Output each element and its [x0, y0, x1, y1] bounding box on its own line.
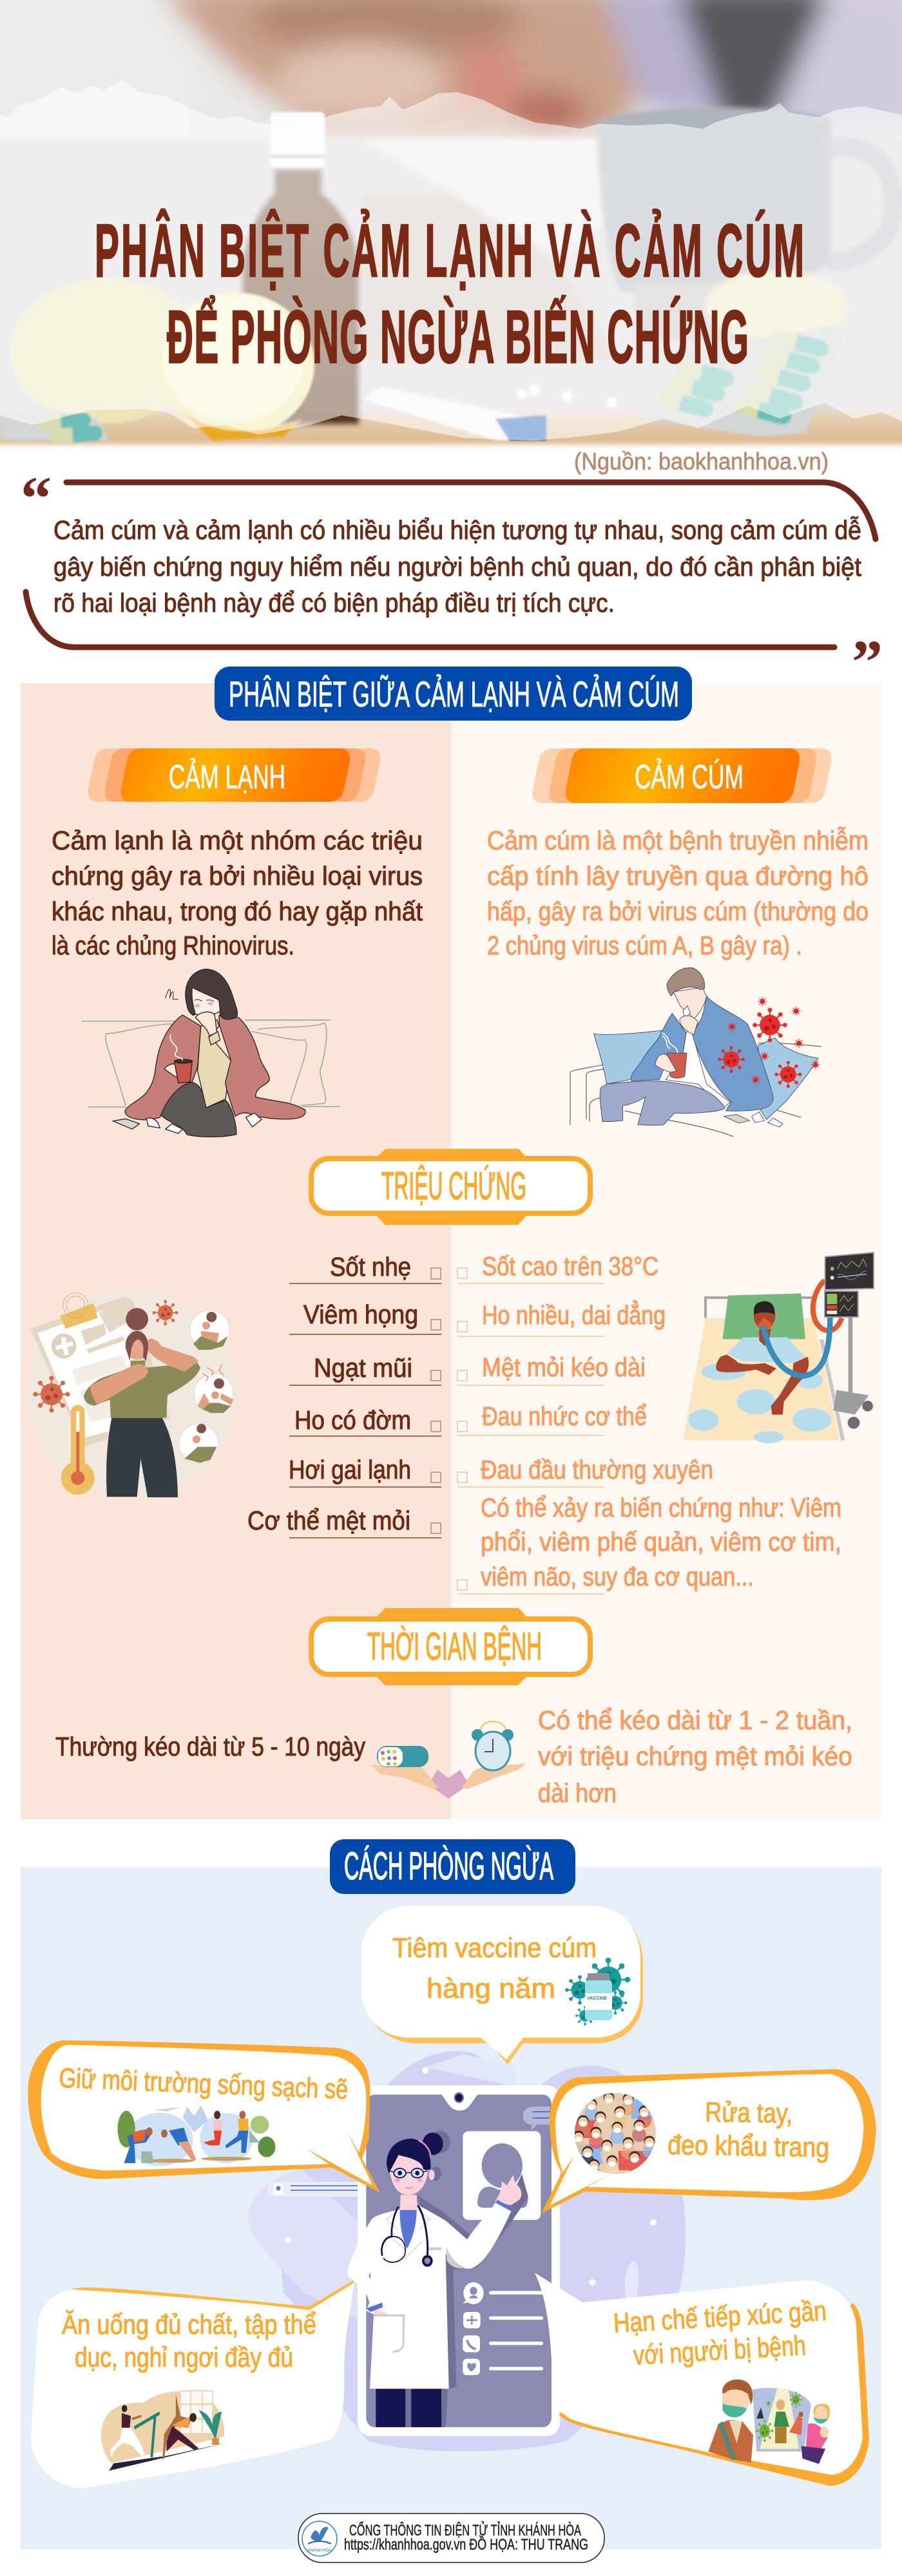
- footer credit pill: [298, 2514, 604, 2562]
- opening quote mark: “: [21, 464, 52, 533]
- text: flu duration: với triệu chứng mệt mỏi kéo: [538, 1741, 852, 1771]
- icon: vaccine vial with virus: [566, 1958, 629, 2025]
- illustration: woman with a cold: [82, 969, 340, 1137]
- heading: prevention: CÁCH PHÒNG NGỪA: [344, 1844, 553, 1888]
- icon: provincial portal logo: [302, 2521, 337, 2556]
- icon: vaccine vial with virus: VACCINE: [587, 1996, 607, 2001]
- symptom list: common cold: Viêm họng: [303, 1300, 418, 1329]
- text: common cold definition: Cảm lạnh là một nhóm các triệu: [52, 826, 423, 855]
- background lavender blobs: [248, 2051, 686, 2451]
- text: common cold definition: chứng gây ra bởi nhiều loại virus: [52, 861, 423, 891]
- small chat label left of phone: [267, 2182, 383, 2197]
- symptom list: flu: [457, 1251, 841, 1594]
- torn translucent paper overlay: [0, 80, 902, 440]
- title: PHÂN BIỆT CẢM LẠNH VÀ CẢM CÚM: [95, 209, 804, 292]
- symptom list: flu: Sốt cao trên 38°C: [482, 1251, 658, 1281]
- symptom list: flu: Ho nhiều, dai dẳng: [482, 1300, 666, 1330]
- illustration: people cleaning up: [117, 2105, 275, 2166]
- phone body: [358, 2085, 560, 2436]
- symptom list: common cold: Ho có đờm: [294, 1405, 411, 1435]
- intro text: gây biến chứng nguy hiểm nếu người bệnh chủ quan, do đó cần phân biệt: [53, 552, 862, 582]
- heading: illness duration: [311, 1608, 590, 1685]
- intro text: [53, 515, 862, 618]
- symptom list: flu: phổi, viêm phế quản, viêm cơ tim,: [481, 1527, 841, 1557]
- callout: hand washing and masks: Rửa tay,: [705, 2097, 793, 2129]
- footer credit pill: CỔNG THÔNG TIN ĐIỆN TỬ TỈNH KHÁNH HÒA: [349, 2521, 581, 2539]
- callout: keep environment clean: [28, 2040, 380, 2193]
- symptom list: flu: Đau đầu thường xuyên: [481, 1455, 713, 1484]
- footer credit pill: https://khanhhoa.gov.vn ĐỒ HỌA: THU TRANG: [344, 2535, 588, 2553]
- intro text: rõ hai loại bệnh này để có biện pháp điều trị tích cực.: [53, 588, 615, 618]
- text: flu definition: Cảm cúm là một bệnh truyền nhiễm: [487, 826, 868, 855]
- text: common cold definition: khác nhau, trong đó hay gặp nhất: [52, 896, 423, 926]
- callout: annual flu vaccine: hàng năm: [427, 1973, 555, 2004]
- illustration: man with flu and viruses: [570, 968, 821, 1137]
- symptom list: flu: Có thể xảy ra biến chứng như: Viêm: [481, 1493, 841, 1522]
- contact list icons: [463, 2282, 542, 2375]
- symptom list: common cold: Sốt nhẹ: [330, 1252, 411, 1282]
- panel: prevention: [21, 1867, 881, 2549]
- heading: illness duration: THỜI GIAN BỆNH: [367, 1625, 542, 1668]
- text: flu definition: [487, 826, 868, 960]
- source credit: (Nguồn: baokhanhhoa.vn): [574, 448, 829, 475]
- callout: nutrition exercise rest: dục, nghỉ ngơi đầy đủ: [75, 2342, 293, 2373]
- pill heading: common cold: CẢM LẠNH: [169, 758, 285, 796]
- symptom list: common cold: Cơ thể mệt mỏi: [247, 1506, 410, 1535]
- illustration: woman with symptoms: [28, 1289, 236, 1497]
- callout: nutrition exercise rest: [31, 2280, 354, 2488]
- symptom list: flu: Đau nhức cơ thể: [482, 1401, 647, 1431]
- symptom list: flu: viêm não, suy đa cơ quan...: [481, 1562, 754, 1591]
- heading: symptoms: TRIỆU CHỨNG: [381, 1164, 526, 1208]
- icon: hands holding pills and clock: [371, 1721, 526, 1799]
- illustration: people in masks keeping distance: [709, 2380, 830, 2464]
- callout: limit close contact: với người bị bệnh: [633, 2330, 807, 2371]
- illustration: people exercising: [101, 2391, 227, 2471]
- text: common cold definition: là các chủng Rhinovirus.: [52, 931, 294, 960]
- callout: hand washing and masks: [541, 2069, 876, 2213]
- callout: annual flu vaccine: [361, 1906, 643, 2065]
- title: [95, 209, 804, 379]
- callout: annual flu vaccine: Tiêm vaccine cúm: [392, 1933, 597, 1964]
- pill heading: common cold: [88, 748, 380, 802]
- symptom list: flu: Mệt mỏi kéo dài: [482, 1352, 646, 1382]
- callout: limit close contact: [535, 2273, 869, 2486]
- symptom list: common cold: Ngạt mũi: [314, 1353, 412, 1383]
- illustration: phone with doctor: [347, 2085, 560, 2436]
- text: flu duration: [538, 1705, 852, 1808]
- panel: comparison: [21, 683, 881, 1819]
- intro quote block: [21, 464, 883, 696]
- callout: keep environment clean: Giữ môi trường sống sạch sẽ: [59, 2063, 349, 2105]
- hero photo: sick person with medicine: [0, 0, 902, 444]
- text: flu duration: Có thể kéo dài từ 1 - 2 tuần,: [538, 1705, 852, 1735]
- text: cold duration: Thường kéo dài từ 5 - 10 ngày: [55, 1732, 365, 1761]
- heading: symptoms: [311, 1149, 590, 1225]
- title: ĐỂ PHÒNG NGỪA BIẾN CHỨNG: [167, 296, 749, 379]
- heading: comparison: [215, 667, 692, 721]
- doctor: [347, 2131, 528, 2427]
- callout: hand washing and masks: đeo khẩu trang: [667, 2130, 830, 2163]
- illustration: crowd wearing masks: [575, 2093, 656, 2174]
- symptom list: common cold: Hơi gai lạnh: [289, 1455, 411, 1484]
- text: flu duration: dài hơn: [538, 1778, 617, 1808]
- callout: nutrition exercise rest: Ăn uống đủ chất, tập thể: [62, 2309, 316, 2340]
- closing quote mark: ”: [852, 627, 883, 696]
- heading: prevention: [330, 1839, 575, 1894]
- text: flu definition: cấp tính lây truyền qua đường hô: [487, 861, 868, 891]
- pill heading: flu: [533, 748, 831, 803]
- pill heading: flu: CẢM CÚM: [635, 758, 744, 796]
- icon: provincial portal logo: KHÁNH HÒA: [308, 2548, 331, 2553]
- symptom list: common cold: [247, 1252, 441, 1538]
- text: flu definition: 2 chủng virus cúm A, B gây ra) .: [487, 931, 802, 960]
- quote frame: [26, 482, 876, 647]
- illustration: patient on ventilator: [683, 1253, 874, 1443]
- text: common cold definition: [52, 826, 423, 960]
- callout: limit close contact: Hạn chế tiếp xúc gần: [613, 2295, 827, 2339]
- profile card: [463, 2131, 541, 2220]
